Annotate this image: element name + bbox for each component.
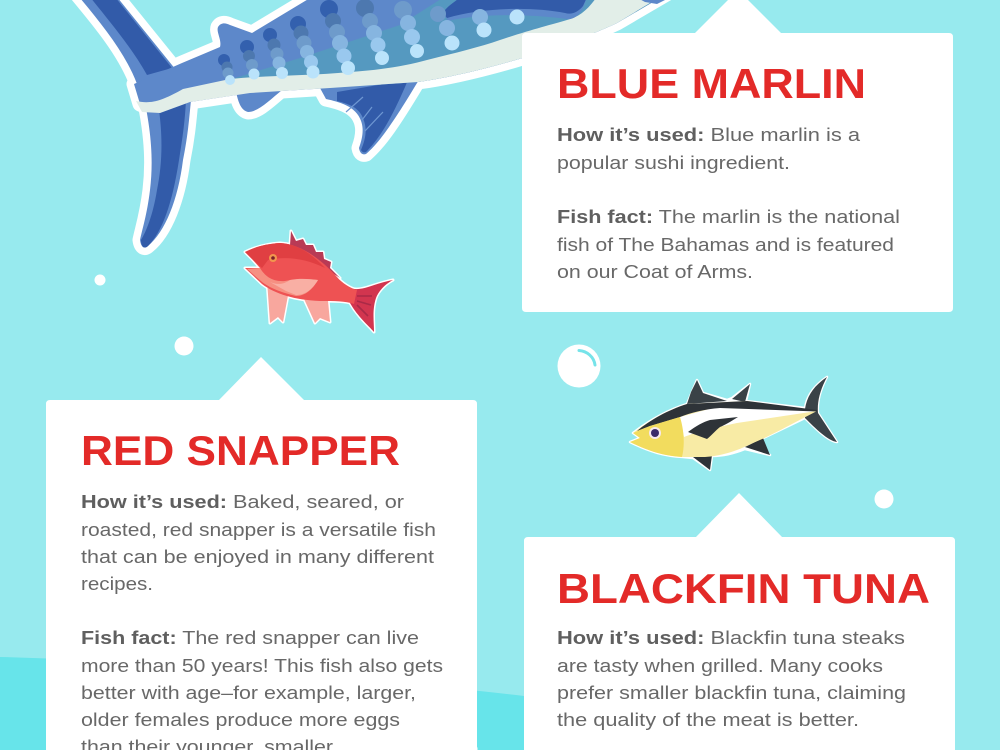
teal flank [235, 0, 670, 90]
top-right blue patch [632, 0, 675, 4]
text: blackfin tuna usage: are tasty when grilled. Many cooks [557, 655, 883, 676]
text: red snapper usage and fact: recipes. [81, 573, 153, 594]
bubble small right [874, 490, 894, 508]
belly band [136, 0, 668, 113]
text: blackfin tuna usage: the quality of the meat is better. [557, 709, 859, 730]
text: red snapper usage and fact: How it’s used: Baked, seared, or [81, 491, 404, 512]
tuna eye [649, 427, 661, 439]
tail fin [350, 280, 393, 332]
text: red snapper usage and fact: roasted, red snapper is a versatile fish [81, 519, 436, 540]
text: blue marlin usage and fact: popular sushi ingredient. [557, 152, 790, 173]
tuna dark back [637, 401, 817, 431]
marlin spots [218, 0, 524, 85]
text: blue marlin usage and fact: fish of The Bahamas and is featured [557, 234, 894, 255]
icon: blackfin tuna fish [630, 377, 837, 470]
bubble medium left [174, 336, 194, 356]
panel: blackfin tuna [524, 493, 955, 750]
pectoral fin [443, 0, 588, 21]
snapper head shading [245, 243, 325, 268]
water wave at bottom [0, 657, 524, 750]
tuna head [630, 417, 684, 457]
text: red snapper usage and fact: better with age–for example, larger, [81, 682, 416, 703]
text: red snapper usage and fact [81, 491, 443, 750]
text: blackfin tuna usage [557, 627, 906, 730]
snapper body [245, 243, 357, 304]
text: blue marlin usage and fact: Fish fact: The marlin is the national [557, 206, 900, 227]
tuna pectoral fin [688, 417, 738, 439]
heading: red snapper: RED SNAPPER [81, 427, 400, 474]
lower tail lobe [140, 100, 191, 248]
tuna lower fins [693, 438, 770, 470]
bubble large centre [558, 344, 600, 388]
text: blue marlin usage and fact: on our Coat of Arms. [557, 261, 753, 282]
marlin white outline [75, 0, 670, 248]
tuna dorsal fins and tail [687, 380, 750, 404]
heading: blackfin tuna: BLACKFIN TUNA [557, 565, 930, 612]
text: blue marlin usage and fact [557, 124, 900, 282]
panel: red snapper [46, 357, 477, 750]
dorsal fin [290, 231, 340, 278]
marlin body [134, 0, 670, 113]
panel: blue marlin [522, 0, 953, 312]
snapper white outline [245, 231, 393, 332]
upper tail lobe [75, 0, 176, 84]
text: blackfin tuna usage: prefer smaller blackfin tuna, claiming [557, 682, 906, 703]
icon: red snapper fish [245, 231, 393, 332]
bubble tiny at panel corner [472, 746, 478, 750]
tuna yellow body [630, 401, 817, 457]
large ventral fin [320, 78, 420, 154]
heading: blue marlin: BLUE MARLIN [557, 60, 866, 107]
text: red snapper usage and fact: more than 50 years! This fish also gets [81, 655, 443, 676]
text: red snapper usage and fact: Fish fact: The red snapper can live [81, 627, 419, 648]
snapper belly [247, 268, 318, 296]
text: blackfin tuna usage: How it’s used: Blackfin tuna steaks [557, 627, 905, 648]
small ventral fin [236, 90, 282, 112]
text: red snapper usage and fact: that can be enjoyed in many different [81, 546, 434, 567]
text: red snapper usage and fact: older females produce more eggs [81, 709, 400, 730]
snapper eye [269, 254, 277, 262]
bubble small left [94, 274, 106, 286]
text: blue marlin usage and fact: How it’s used: Blue marlin is a [557, 124, 861, 145]
snapper pelvic fins [267, 280, 289, 323]
icon: blue marlin fish [75, 0, 675, 248]
tuna white outline [630, 377, 837, 470]
tuna white stripe [680, 406, 817, 437]
